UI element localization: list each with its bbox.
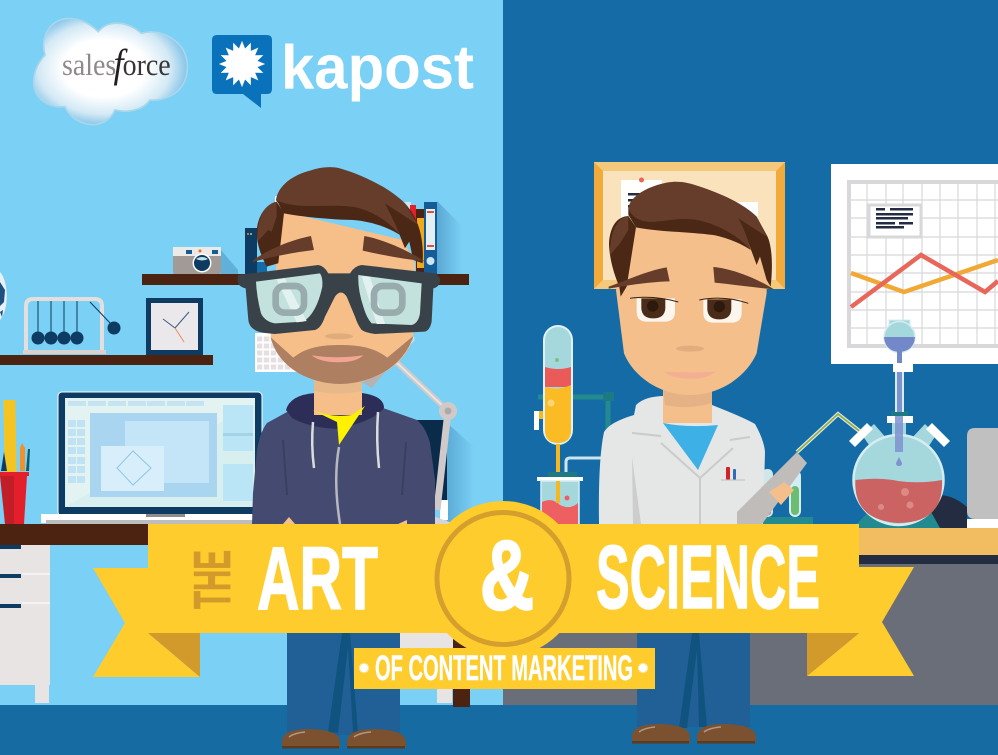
mouth bbox=[664, 372, 716, 379]
nose bbox=[325, 333, 353, 339]
eyebrows bbox=[253, 236, 314, 262]
wordmark: kapost: kapost bbox=[281, 34, 474, 102]
corkboard bbox=[594, 162, 785, 289]
dark mound behind flask bbox=[900, 495, 967, 528]
icon: wall clock bbox=[146, 298, 203, 355]
subtitle: OF CONTENT MARKETING bbox=[375, 649, 633, 688]
hair bbox=[257, 167, 423, 267]
subtitle plate bbox=[354, 648, 655, 689]
separating funnel bbox=[884, 320, 915, 412]
banner bbox=[93, 501, 914, 689]
icon: laptop bbox=[41, 392, 262, 524]
mouth bbox=[312, 355, 363, 362]
wordmark: salesforce: sales bbox=[62, 49, 116, 82]
panel: science background bbox=[503, 0, 998, 705]
art character bbox=[238, 167, 440, 748]
pens in pocket bbox=[726, 467, 730, 480]
heading: art: ART bbox=[257, 528, 378, 628]
top shelf bbox=[142, 274, 469, 285]
jeans bbox=[637, 625, 750, 728]
ampersand: & bbox=[480, 520, 534, 630]
glasses bbox=[238, 265, 440, 334]
chart note bbox=[869, 205, 921, 237]
jeans bbox=[287, 625, 400, 735]
head bbox=[253, 167, 425, 384]
right eye bbox=[699, 298, 748, 323]
nose bbox=[676, 346, 704, 352]
face bbox=[616, 227, 767, 395]
lab counter bbox=[859, 528, 998, 555]
glass tube bbox=[797, 414, 877, 452]
wordmark: salesforce: orce bbox=[123, 49, 171, 82]
lower shelf bbox=[0, 355, 213, 365]
shoes bbox=[632, 724, 756, 744]
icon: wall calendar bbox=[255, 333, 301, 372]
face bbox=[271, 212, 415, 384]
chart poster bbox=[831, 164, 998, 364]
beaker bbox=[537, 472, 583, 526]
art desk scene bbox=[0, 196, 474, 707]
small test tubes bbox=[752, 469, 813, 524]
grey cabinet bbox=[503, 564, 998, 705]
icon: camera bbox=[173, 247, 238, 274]
shoes bbox=[282, 729, 406, 748]
icon: right burst bbox=[637, 662, 649, 674]
science lab scene bbox=[503, 162, 998, 705]
test tube apparatus bbox=[534, 325, 614, 480]
head bbox=[609, 182, 774, 395]
books on top shelf bbox=[245, 196, 462, 274]
icon: speech bubble bbox=[212, 35, 272, 108]
eyebrows bbox=[609, 267, 670, 289]
flask stand bbox=[853, 510, 940, 528]
desk drawers left bbox=[0, 545, 50, 703]
science character bbox=[599, 182, 807, 743]
left ribbon fold bbox=[148, 633, 200, 677]
round-bottom flask bbox=[849, 400, 950, 525]
lab coat bbox=[599, 385, 765, 524]
glass tube core bbox=[797, 414, 877, 452]
icon: globe bbox=[0, 272, 7, 320]
logo: kapost bbox=[212, 34, 474, 108]
icon: newton's cradle bbox=[23, 299, 120, 354]
floor bbox=[0, 705, 998, 755]
hoodie bbox=[252, 370, 435, 524]
hands bbox=[283, 517, 407, 524]
panel: art background bbox=[0, 0, 502, 705]
clipboard and hand bbox=[737, 452, 807, 524]
icon: desk monitor and lamp bbox=[363, 335, 474, 524]
icon: starburst bbox=[219, 41, 265, 87]
ampersand medallion bbox=[425, 501, 581, 657]
icon: pen cup with ruler bbox=[0, 400, 30, 524]
left eye bbox=[630, 297, 678, 322]
logo: salesforce bbox=[34, 18, 187, 125]
desk drawers right bbox=[400, 633, 470, 707]
heading: the: THE bbox=[184, 550, 242, 609]
icon: left burst bbox=[358, 662, 370, 674]
heading: science: SCIENCE bbox=[596, 528, 820, 628]
wordmark: salesforce: f bbox=[114, 42, 128, 86]
right ribbon tail bbox=[807, 567, 914, 676]
red line bbox=[851, 255, 998, 307]
counter underside bbox=[859, 555, 998, 564]
orange line bbox=[851, 260, 998, 292]
icon: grey machine bbox=[967, 428, 998, 528]
hair bbox=[609, 182, 772, 297]
right ribbon fold bbox=[807, 633, 859, 676]
banner main band bbox=[148, 524, 859, 633]
desk top bbox=[0, 524, 148, 545]
beard bbox=[271, 336, 413, 384]
left ribbon tail bbox=[93, 568, 200, 677]
